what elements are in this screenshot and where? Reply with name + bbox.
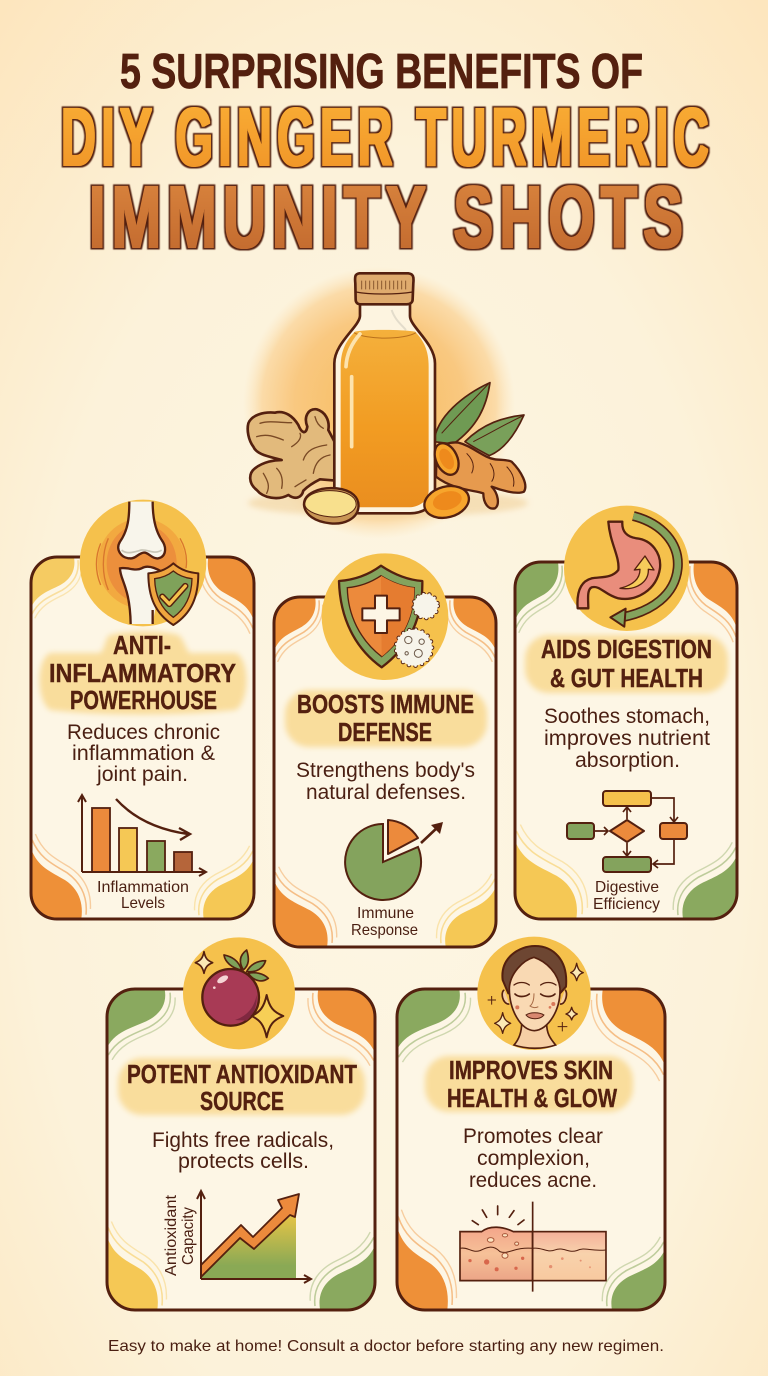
description: inflammation & bbox=[72, 741, 215, 765]
description: joint pain. bbox=[96, 762, 188, 786]
description bbox=[544, 704, 710, 772]
description bbox=[463, 1124, 603, 1192]
heading bbox=[40, 632, 246, 715]
description: absorption. bbox=[575, 748, 680, 772]
heading: ANTI- bbox=[113, 632, 171, 660]
description: reduces acne. bbox=[469, 1168, 597, 1192]
ginger slice bbox=[304, 488, 359, 524]
description bbox=[296, 758, 475, 804]
description bbox=[152, 1128, 334, 1173]
heading: HEALTH & GLOW bbox=[447, 1085, 618, 1113]
icon: knee joint with shield bbox=[80, 500, 206, 626]
flowchart: digestive efficiency: Efficiency bbox=[593, 896, 660, 913]
heading bbox=[525, 635, 728, 693]
description: Soothes stomach, bbox=[544, 704, 710, 728]
panel: potent antioxidant source bbox=[103, 937, 379, 1314]
panel: anti-inflammatory powerhouse bbox=[28, 500, 257, 923]
description: improves nutrient bbox=[544, 726, 710, 750]
pie chart: immune response bbox=[345, 820, 443, 939]
description: Fights free radicals, bbox=[152, 1128, 334, 1152]
heading bbox=[285, 690, 487, 747]
juice bbox=[341, 330, 429, 507]
turmeric slice bbox=[421, 481, 473, 523]
sun halo bbox=[243, 267, 515, 539]
heading: DEFENSE bbox=[338, 719, 432, 747]
description: Reduces chronic bbox=[67, 720, 220, 744]
heading: AIDS DIGESTION bbox=[541, 636, 712, 664]
pie chart: immune response: Response bbox=[351, 922, 418, 939]
area chart: antioxidant capacity: Capacity bbox=[180, 1207, 197, 1265]
description: protects cells. bbox=[178, 1149, 309, 1173]
title bbox=[61, 45, 714, 266]
heading: BOOSTS IMMUNE bbox=[297, 691, 474, 719]
bottle glass bbox=[334, 303, 435, 513]
panel: aids digestion and gut health bbox=[511, 506, 741, 924]
heading: INFLAMMATORY bbox=[49, 660, 236, 688]
bar chart: inflammation levels: Levels bbox=[121, 895, 165, 912]
area chart: antioxidant capacity: Antioxidant bbox=[163, 1194, 180, 1276]
icon: glowing face bbox=[477, 937, 591, 1050]
area chart: antioxidant capacity bbox=[163, 1191, 311, 1283]
description: Strengthens body's bbox=[296, 758, 475, 782]
ground shadow bbox=[248, 489, 528, 517]
panel: boosts immune defense bbox=[271, 553, 499, 951]
heading bbox=[118, 1058, 365, 1116]
heading: IMPROVES SKIN bbox=[449, 1057, 613, 1085]
flowchart: digestive efficiency bbox=[567, 791, 687, 913]
flowchart: digestive efficiency: Digestive bbox=[595, 879, 659, 896]
icon: stomach with circular arrow bbox=[564, 506, 689, 631]
heading: POTENT ANTIOXIDANT bbox=[127, 1061, 357, 1089]
icon: shield with immune cells bbox=[322, 553, 448, 680]
leaves bbox=[434, 383, 524, 456]
panel: improves skin health and glow bbox=[393, 937, 669, 1315]
heading: SOURCE bbox=[200, 1088, 284, 1116]
heading: & GUT HEALTH bbox=[550, 665, 703, 693]
bar chart: inflammation levels: Inflammation bbox=[97, 879, 189, 896]
bottle highlights bbox=[346, 334, 360, 447]
pie chart: immune response: Immune bbox=[357, 905, 414, 922]
bottle cap bbox=[355, 273, 414, 304]
description: complexion, bbox=[477, 1146, 590, 1170]
footer note: Easy to make at home! Consult a doctor before starting any new regimen. bbox=[108, 1338, 664, 1355]
hero illustration: bottle with ginger and turmeric bbox=[243, 267, 528, 539]
bar chart: inflammation levels bbox=[78, 795, 206, 912]
description: Promotes clear bbox=[463, 1124, 603, 1148]
heading: POWERHOUSE bbox=[70, 687, 217, 715]
heading bbox=[425, 1056, 633, 1113]
ginger root bbox=[248, 409, 337, 498]
description bbox=[67, 720, 220, 786]
description: natural defenses. bbox=[306, 780, 466, 804]
turmeric root bbox=[421, 439, 525, 523]
diagram: skin before and after bbox=[460, 1202, 606, 1292]
icon: berry with sparkles bbox=[183, 937, 295, 1049]
